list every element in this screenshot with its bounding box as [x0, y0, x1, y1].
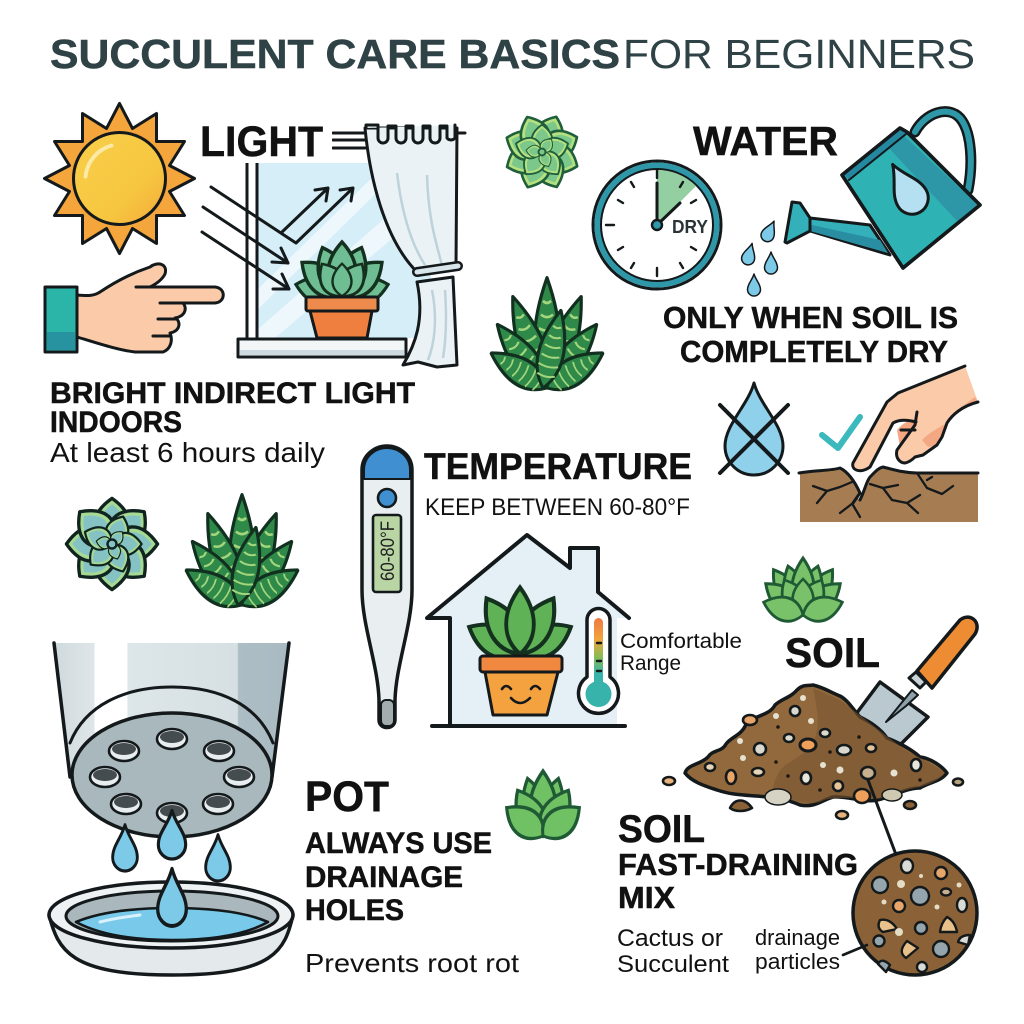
text: cactus or succulent: Cactus or	[617, 925, 723, 952]
icon: falling water drops	[740, 218, 780, 296]
heading: soil top: SOIL	[785, 629, 880, 676]
text: drainage holes advice: DRAINAGE	[305, 861, 463, 894]
icon: trowel	[853, 617, 977, 748]
pebbles	[663, 706, 963, 819]
panel: pot	[49, 643, 520, 978]
drainage holes	[90, 729, 254, 823]
leader line: drainage particles	[843, 945, 867, 955]
heading: temperature: TEMPERATURE	[424, 446, 692, 487]
icon: digital thermometer: 60-80°F	[378, 521, 399, 581]
icon: dry cracked soil	[799, 467, 978, 522]
text: prevents root rot: Prevents root rot	[305, 948, 520, 978]
panel: soil	[617, 617, 977, 978]
text: light description: At least 6 hours daily	[50, 437, 325, 468]
happy potted plant	[462, 587, 578, 715]
text: water instruction: COMPLETELY DRY	[680, 334, 948, 369]
icon: lotus succulent near soil	[758, 558, 848, 626]
icon: sun	[44, 104, 194, 254]
heading: pot: POT	[305, 773, 389, 821]
text: temperature range: KEEP BETWEEN 60-80°F	[425, 494, 690, 521]
panel: water	[593, 112, 980, 522]
text: comfortable range	[620, 630, 742, 675]
title: FOR BEGINNERS	[623, 31, 975, 77]
falling drops	[113, 811, 230, 881]
text: water instruction: ONLY WHEN SOIL IS	[663, 300, 958, 335]
text: fast-draining mix: FAST-DRAINING	[618, 847, 858, 882]
text: water instruction	[663, 300, 958, 369]
text: light description: BRIGHT INDIRECT LIGHT	[50, 377, 415, 410]
icon: striped aloe top	[484, 278, 610, 399]
text: comfortable range: Comfortable	[620, 630, 742, 653]
heading: soil lower: SOIL	[618, 808, 705, 851]
curtain	[365, 125, 458, 367]
icon: lotus succulent near pot	[498, 771, 588, 847]
heading: water: WATER	[693, 118, 838, 164]
text: fast-draining mix	[618, 847, 858, 915]
arrows: light rays	[202, 187, 353, 289]
icon: watering can	[785, 112, 980, 268]
heading: light: LIGHT	[200, 118, 323, 166]
icon: striped aloe left	[179, 495, 305, 616]
icon: saucer with water	[49, 869, 293, 975]
text: cactus or succulent	[617, 925, 729, 978]
icon: check mark	[822, 417, 860, 448]
text: light description	[50, 377, 415, 468]
title: SUCCULENT CARE BASICS	[50, 31, 620, 77]
text: light description: INDOORS	[50, 406, 182, 439]
text: fast-draining mix: MIX	[618, 880, 675, 915]
icon: rosette succulent top	[501, 111, 583, 193]
text: drainage holes advice: ALWAYS USE	[305, 827, 492, 860]
text: drainage holes advice: HOLES	[305, 894, 404, 927]
panel: light	[44, 104, 465, 468]
text: drainage particles: particles	[755, 949, 840, 974]
text: drainage holes advice	[305, 827, 492, 927]
text: drainage particles	[755, 925, 840, 974]
icon: clock	[593, 161, 721, 289]
icon: soil pile	[663, 685, 963, 819]
icon: digital thermometer	[362, 446, 412, 728]
text: cactus or succulent: Succulent	[617, 951, 729, 978]
icon: pot bottom with drainage holes	[54, 643, 289, 881]
panel: temperature	[362, 446, 742, 728]
drop on can	[879, 156, 934, 220]
small thermometer	[578, 608, 618, 713]
icon: pointing hand	[45, 264, 223, 352]
icon: hand testing soil	[853, 366, 978, 471]
callout line	[868, 780, 895, 852]
icon: house with happy plant	[427, 535, 629, 726]
icon: window with plant and curtain	[238, 125, 465, 367]
icon: crossed-out water drop	[720, 383, 788, 475]
text: comfortable range: Range	[620, 652, 681, 675]
text: drainage particles: drainage	[755, 925, 840, 950]
icon: magnified soil	[853, 851, 977, 975]
potted succulent	[293, 242, 391, 338]
icon: blue-green rosette	[66, 498, 158, 590]
icon: clock: DRY	[672, 217, 708, 237]
